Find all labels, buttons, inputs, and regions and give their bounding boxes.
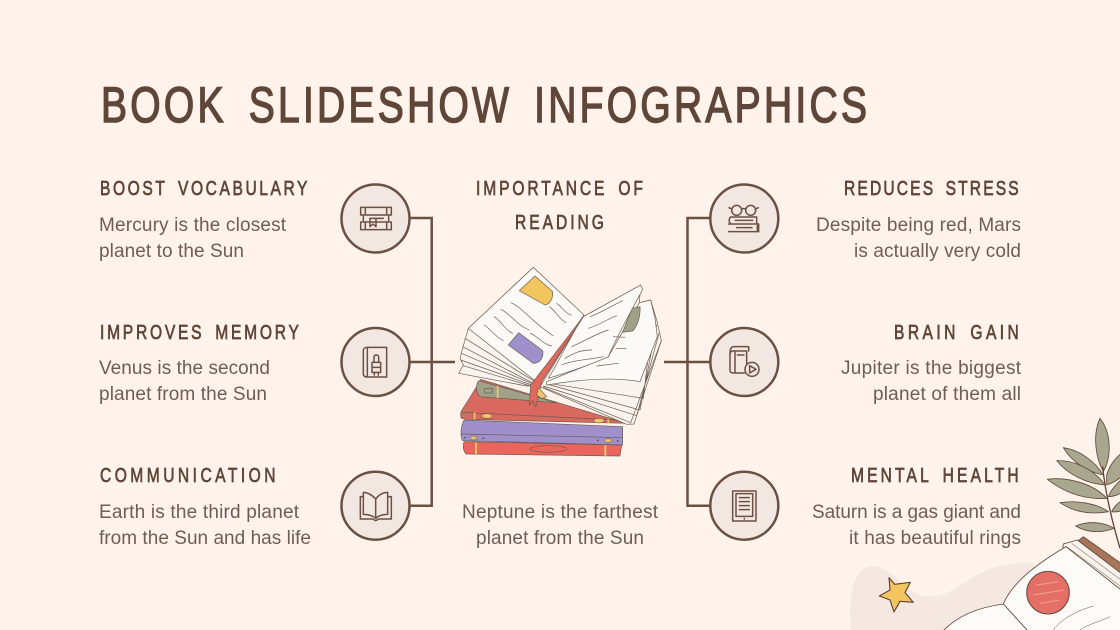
body text: planet of them all [873,384,1021,405]
panel: boost vocabulary [99,177,308,262]
body text: Earth is the third planet [99,502,300,523]
left page block [459,267,583,386]
background blob [850,562,1053,630]
green tab [623,307,640,332]
panel: improves memory [99,321,299,405]
body text: planet from the Sun [476,528,644,549]
heading: MENTAL HEALTH [851,464,1019,486]
body text: Jupiter is the biggest [841,358,1022,379]
body text [99,215,287,262]
heading: IMPORTANCE OF [476,177,643,199]
body text [812,502,1021,549]
body text: Neptune is the farthest [462,502,659,523]
heading: BOOST VOCABULARY [100,177,308,199]
heading: BRAIN GAIN [894,321,1019,343]
body text: Mercury is the closest [99,215,287,236]
icon circles: left [342,184,410,540]
heading [476,177,643,233]
icon circles: right [710,184,778,540]
body text: planet from the Sun [99,384,267,405]
icon: book with lock [363,347,387,377]
icon: e-reader [733,491,756,521]
body text [816,215,1021,262]
panel: mental health [812,464,1021,549]
body text: it has beautiful rings [849,528,1021,549]
panel: importance of reading [462,177,659,549]
body text: from the Sun and has life [99,528,311,549]
title: BOOK SLIDESHOW INFOGRAPHICS [101,76,867,133]
body text [99,502,311,549]
heading: READING [515,211,604,233]
decoration: bottom-right corner [850,418,1120,630]
heading: COMMUNICATION [100,464,275,486]
left top page [468,267,584,383]
plant [1047,418,1120,548]
open book [459,267,661,424]
icon: stacked books with bookmark [361,207,391,230]
top right page [548,285,643,378]
heading: REDUCES STRESS [844,177,1019,199]
icon: open book [360,492,391,521]
purple tab [508,333,543,363]
icon: star [879,578,913,612]
body text: is actually very cold [854,241,1021,262]
body text: Despite being red, Mars [816,215,1021,236]
ribbon [529,316,584,407]
body text: planet to the Sun [99,241,244,262]
connector: left [409,218,455,506]
page squiggles [484,303,571,346]
panel: reduces stress [816,177,1021,262]
icon: book with play button [730,347,759,376]
body text [841,358,1022,405]
yellow tab [519,276,553,305]
second right page [547,300,657,385]
open book [943,537,1120,630]
connector: right [664,218,710,506]
green book [477,381,557,403]
panel: brain gain [841,321,1022,405]
heading: IMPROVES MEMORY [100,321,299,343]
body text: Venus is the second [99,358,270,379]
body text [462,502,659,549]
icon: glasses on books [729,205,759,232]
purple book [461,420,623,445]
bottom red book [463,442,622,456]
body text: Saturn is a gas giant and [812,502,1021,523]
right page block [540,285,661,424]
body text [99,358,270,405]
panel: communication [99,464,311,549]
upper red book [461,379,627,423]
illustration: book stack with open book [459,267,661,456]
